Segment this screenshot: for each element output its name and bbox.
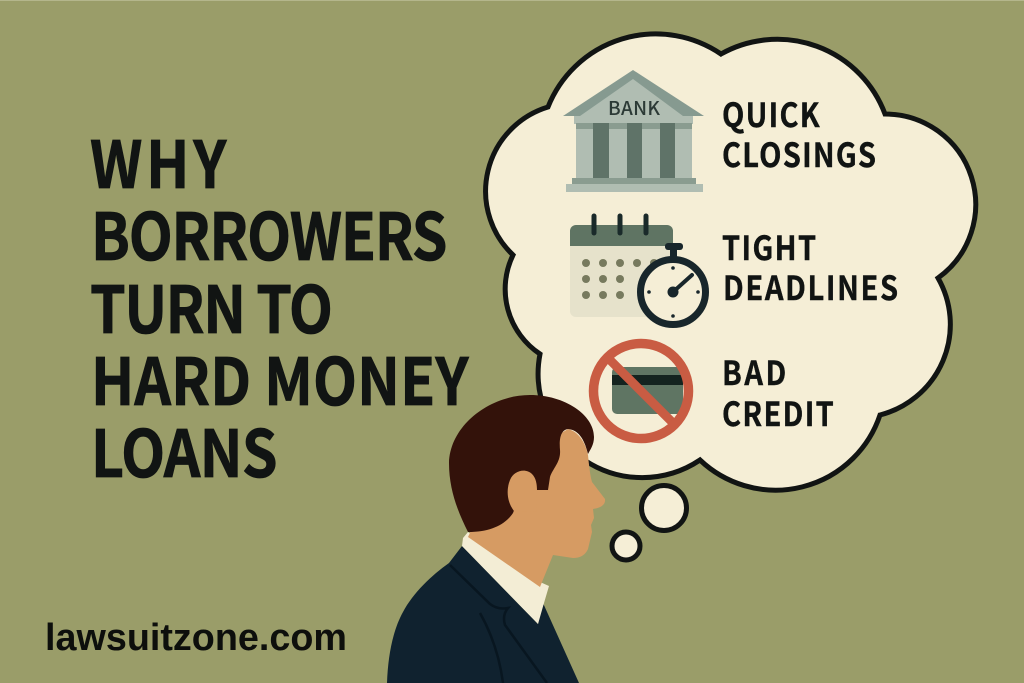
label: bad credit: BAD [722,347,786,395]
icon: crossed-out credit card [594,344,688,438]
ear [508,471,537,512]
title: HARD MONEY [91,330,469,424]
thought bubble: small [612,532,640,560]
title: LOANS [91,402,278,496]
label: bad credit: CREDIT [722,388,834,436]
jacket lapel lines [450,565,547,683]
website label: lawsuitzone.com [45,617,347,659]
hair [449,395,594,532]
suit jacket [387,546,579,683]
label: tight deadlines: TIGHT [722,222,816,270]
label: quick closings: CLOSINGS [722,129,876,177]
thought bubble: large [642,486,686,530]
title [90,113,469,496]
label: bad credit [722,347,834,436]
label: quick closings: QUICK [722,89,820,137]
icon: calendar with stopwatch [570,216,706,324]
title: TURN TO [90,258,333,352]
title: BORROWERS [91,185,447,279]
title: WHY [90,113,227,207]
person in profile [387,395,605,683]
face and neck [468,429,605,587]
thought cloud [486,34,976,490]
icon: bank: BANK [608,94,660,121]
shirt collar [462,532,549,624]
label: tight deadlines: DEADLINES [723,262,898,310]
label: quick closings [722,89,876,177]
icon: bank [563,70,704,192]
label: tight deadlines [722,222,898,310]
